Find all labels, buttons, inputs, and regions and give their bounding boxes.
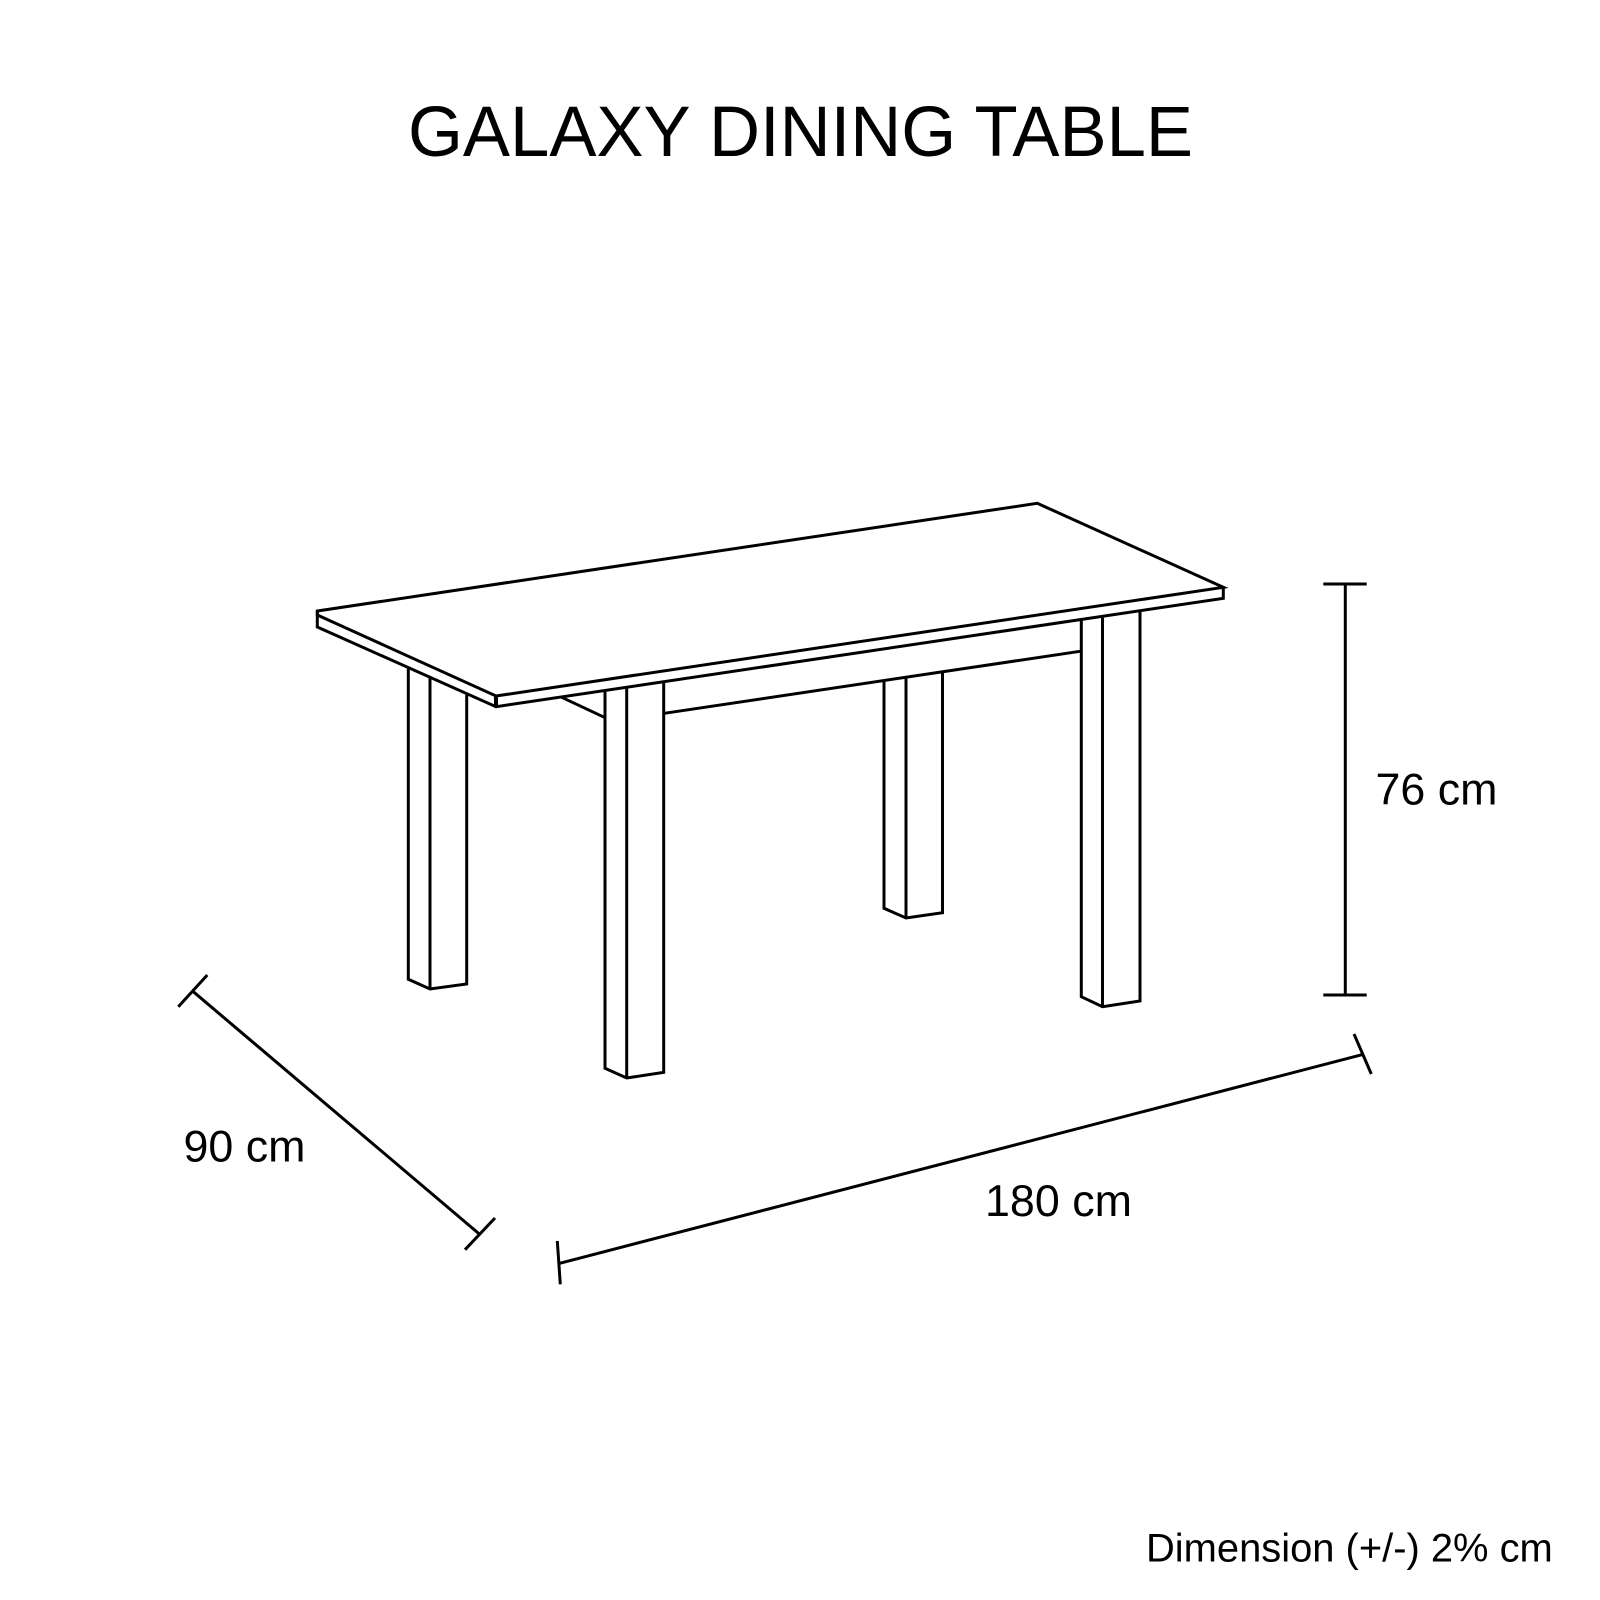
title: GALAXY DINING TABLE bbox=[408, 93, 1193, 172]
dimension: height 76 cm: 76 cm bbox=[1376, 764, 1498, 814]
dimension: depth 90 cm: 90 cm bbox=[184, 1122, 306, 1172]
dimension: height 76 cm bbox=[1323, 584, 1498, 995]
dimension: width 180 cm: 180 cm bbox=[985, 1176, 1132, 1226]
leg: front right bbox=[1081, 611, 1140, 1007]
apron bbox=[562, 651, 1080, 717]
leg: front left bbox=[605, 682, 664, 1078]
footnote: dimension tolerance: Dimension (+/-) 2% cm bbox=[1146, 1527, 1553, 1571]
leg: back left bbox=[408, 668, 467, 989]
dimension: depth 90 cm bbox=[178, 975, 495, 1250]
table top bbox=[317, 503, 1223, 707]
table drawing bbox=[317, 503, 1223, 1078]
dimension: width 180 cm bbox=[557, 1034, 1371, 1284]
leg: back right bbox=[884, 672, 942, 918]
